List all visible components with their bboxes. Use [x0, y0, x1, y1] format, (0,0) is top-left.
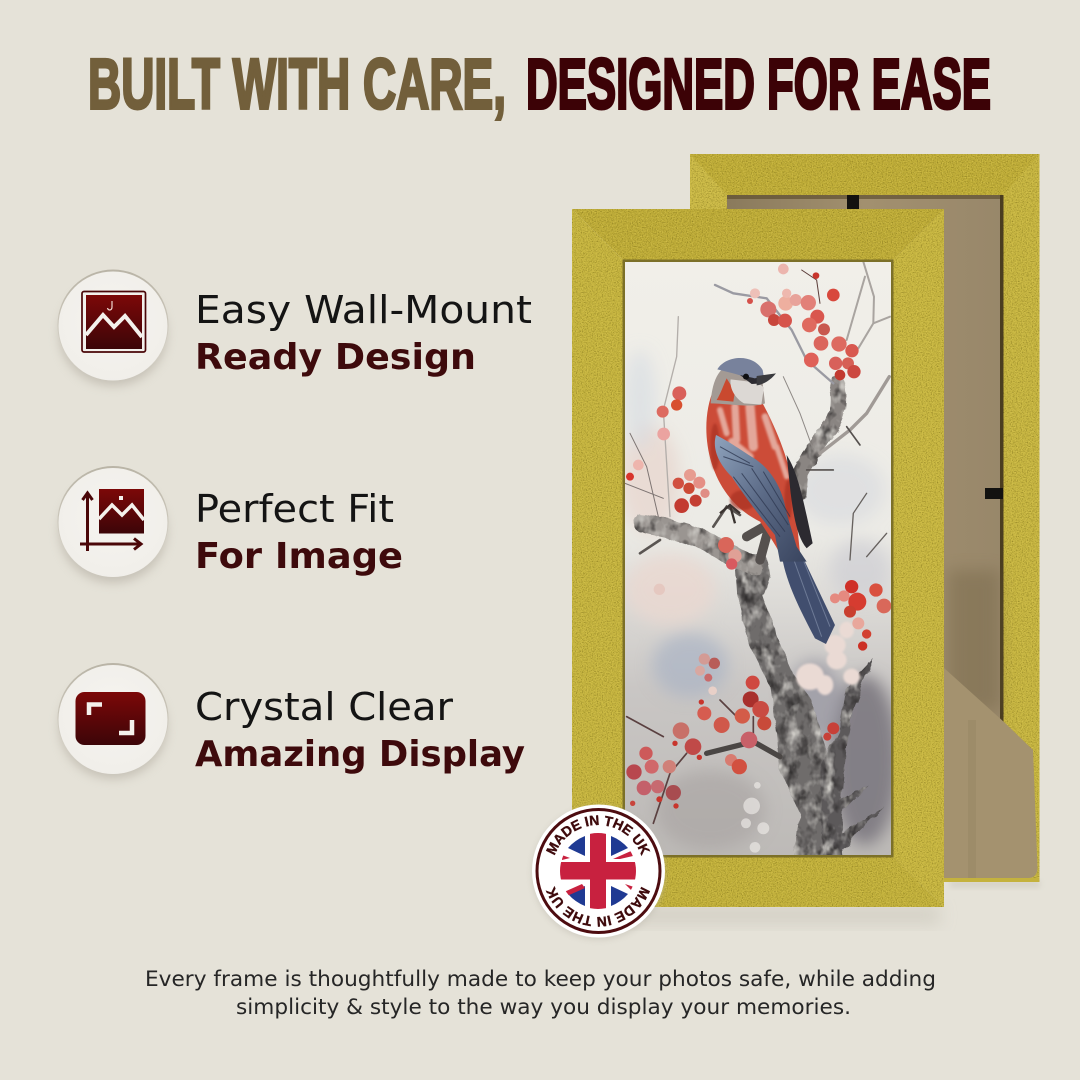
front frame — [572, 209, 944, 925]
text: easy wall-mount: Easy Wall-Mount — [195, 288, 532, 332]
badge: made in the UK — [530, 804, 668, 941]
berries: lower — [626, 558, 891, 809]
blossoms — [741, 622, 860, 853]
feature: crystal clear — [58, 663, 525, 779]
back of frame — [690, 154, 1040, 888]
feature: perfect fit — [58, 466, 403, 583]
text: perfect fit: For Image — [195, 536, 403, 577]
title: BUILT WITH CARE, — [88, 46, 506, 124]
bird body — [706, 387, 800, 560]
text: easy wall-mount: Ready Design — [195, 337, 476, 378]
dark primary feathers — [787, 455, 813, 548]
footer text: Every frame is thoughtfully made to keep your photos safe, while adding — [145, 967, 936, 992]
cardboard backing — [727, 195, 1003, 878]
head and throat — [711, 368, 765, 406]
hanger clips — [847, 195, 1003, 499]
curved text: MADE IN THE UK — [546, 815, 650, 856]
frame moulding — [572, 209, 944, 907]
bird foot — [720, 505, 740, 523]
icon: full-screen display — [76, 692, 146, 745]
branches — [625, 262, 890, 565]
berries: upper — [626, 264, 861, 563]
wing — [715, 435, 807, 562]
artwork: bird on berry branch — [620, 262, 899, 857]
text: easy wall-mount — [195, 288, 532, 378]
text: crystal clear — [195, 685, 525, 775]
icon: framed picture with hook — [82, 292, 146, 352]
watercolour washes — [620, 350, 899, 850]
kickstand — [944, 668, 1038, 878]
icon: picture with dimension arrows — [80, 489, 144, 551]
text: perfect fit — [195, 487, 403, 577]
curved text — [546, 815, 650, 927]
tail — [782, 558, 835, 644]
footer text: simplicity & style to the way you display your memories. — [236, 995, 851, 1020]
back frame moulding — [690, 154, 1040, 882]
footer text — [145, 967, 936, 1020]
text: crystal clear: Crystal Clear — [195, 685, 453, 729]
trunk — [735, 553, 885, 857]
feature: easy wall-mount — [58, 270, 532, 386]
icon: union flag — [560, 833, 636, 909]
tail and bird — [782, 558, 835, 644]
text: crystal clear: Amazing Display — [195, 734, 525, 775]
text: perfect fit: Perfect Fit — [195, 487, 394, 531]
curved text: MADE IN THE UK — [546, 886, 650, 927]
